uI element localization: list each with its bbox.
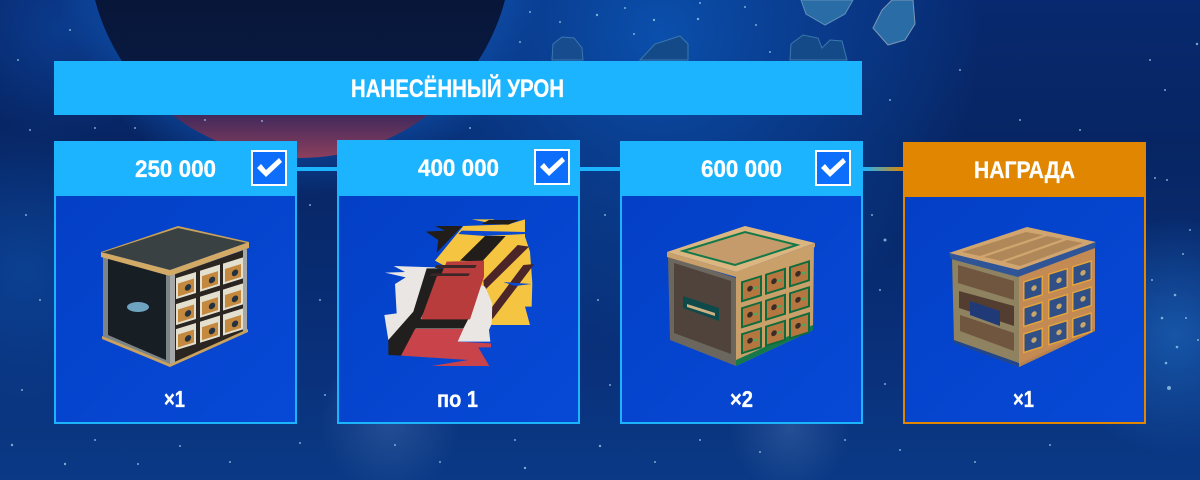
title banner xyxy=(54,61,862,115)
connector: tier 3 to reward xyxy=(863,167,903,171)
connector: tier 1 to tier 2 xyxy=(297,167,337,171)
decal: yellow striped xyxy=(426,219,534,325)
label: по 1: по 1 xyxy=(437,386,478,412)
icon: checkbox checked xyxy=(252,151,286,185)
panel: 250 000 damage tier xyxy=(54,141,297,424)
title banner: НАНЕСЁННЫЙ УРОН xyxy=(351,73,564,103)
decal: white, black and red xyxy=(384,261,492,366)
heading: 250 000: 250 000 xyxy=(135,156,216,183)
panel: 600 000 damage tier xyxy=(620,141,863,424)
heading: 600 000: 600 000 xyxy=(701,156,782,183)
icon: checkbox checked xyxy=(816,151,850,185)
icon: checkbox checked xyxy=(535,150,569,184)
asteroids xyxy=(552,0,915,60)
label: ×1: ×1 xyxy=(164,386,185,412)
label: ×2: ×2 xyxy=(730,386,753,412)
icon: wooden chest with blue drawers xyxy=(949,227,1096,367)
planet xyxy=(95,0,505,158)
connector: tier 2 to tier 3 xyxy=(580,167,620,171)
icon: wooden chest with green trim xyxy=(667,226,815,366)
icon: dark chest xyxy=(101,226,249,367)
label: ×1: ×1 xyxy=(1013,386,1034,412)
heading: 400 000: 400 000 xyxy=(418,155,499,182)
icon: torn camouflage decals xyxy=(384,219,534,366)
panel: reward xyxy=(903,142,1146,424)
panel: 400 000 damage tier xyxy=(337,140,580,424)
heading: НАГРАДА: НАГРАДА xyxy=(974,157,1075,184)
